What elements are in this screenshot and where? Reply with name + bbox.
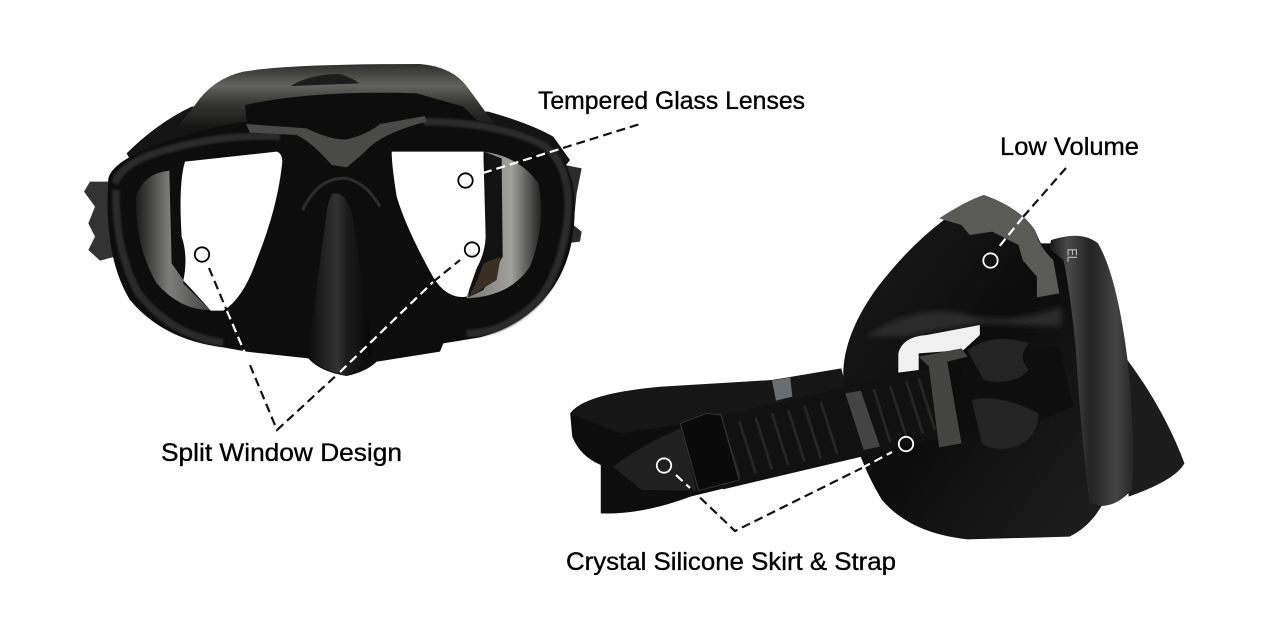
lower buckle knob — [972, 398, 1039, 449]
front view of dive mask — [84, 64, 582, 376]
frame rim highlight — [115, 122, 568, 343]
upper buckle knob — [968, 339, 1029, 382]
leader lines white — [227, 282, 433, 372]
white reflection — [898, 325, 980, 373]
side view of dive mask — [570, 195, 1184, 539]
upper skirt — [175, 64, 495, 137]
marker — [458, 173, 473, 188]
left lens clear area — [181, 152, 282, 311]
heading label: Low Volume — [1000, 133, 1139, 161]
callout: tempered glass lenses — [458, 87, 805, 188]
strap bright rib — [845, 391, 880, 450]
rear strap behind front mask — [127, 107, 570, 190]
leader lines white — [676, 452, 892, 488]
leader line outer — [563, 124, 640, 148]
nose arch — [303, 178, 380, 210]
leader lines black — [209, 260, 460, 430]
marker left lens — [195, 247, 209, 262]
buckle bar — [919, 348, 968, 447]
leader line — [483, 148, 563, 173]
right lens dark inner bar — [468, 152, 503, 297]
far strap — [570, 368, 849, 467]
right lens brown reflection — [468, 257, 501, 297]
tail tab — [613, 428, 697, 491]
strap ribs — [723, 378, 935, 477]
frame outer and lower skirt — [108, 116, 575, 376]
keeper loop — [680, 413, 739, 491]
left buckle — [84, 182, 115, 261]
heading label: Split Window Design — [161, 439, 402, 467]
upper skirt highlight — [939, 195, 1059, 297]
right lens reflection — [467, 152, 541, 298]
near strap — [703, 368, 953, 489]
side skirt — [843, 195, 1102, 539]
strap label tab — [772, 377, 792, 401]
right lens clear area — [392, 152, 486, 297]
left lens dark inner bar — [169, 163, 185, 280]
top skirt vent — [291, 74, 359, 86]
nose pocket — [308, 193, 372, 376]
left lens reflection — [136, 170, 210, 310]
buckle connector — [961, 347, 1074, 433]
dark skirt recess — [245, 93, 480, 137]
marker strap — [899, 437, 913, 451]
brow bridge highlight — [246, 116, 427, 167]
right buckle — [565, 165, 582, 243]
heading label: Crystal Silicone Skirt & Strap — [566, 548, 896, 576]
callout: low volume — [983, 133, 1139, 268]
callout: crystal silicone skirt and strap — [566, 437, 913, 576]
skirt sheen — [866, 307, 1061, 337]
marker strap tail — [657, 458, 671, 473]
strap tail — [570, 413, 731, 513]
brand mark on frame: EL — [1064, 248, 1080, 262]
side frame — [1049, 236, 1133, 506]
marker right lens — [465, 242, 479, 257]
leader lines black — [690, 468, 862, 531]
rear lens wedge — [1122, 353, 1184, 497]
leader line outer — [1023, 168, 1066, 217]
leader line inner — [998, 217, 1023, 248]
callout: split window design — [161, 242, 479, 467]
marker — [983, 253, 998, 268]
heading label: Tempered Glass Lenses — [538, 87, 805, 115]
